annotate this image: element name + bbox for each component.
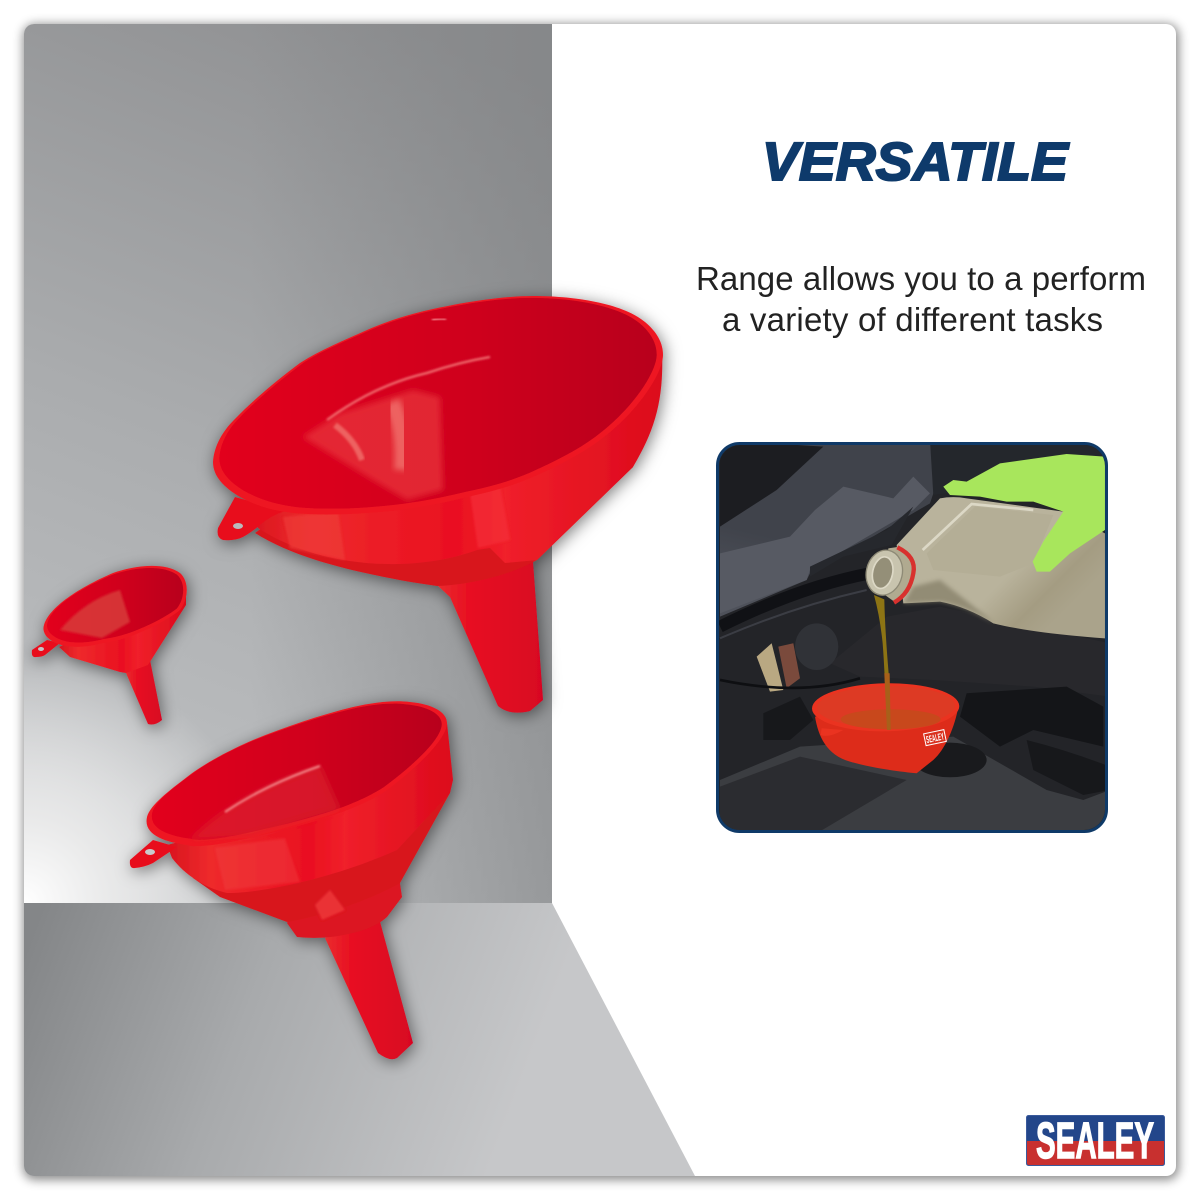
cover recess [720,440,823,527]
bottle body [897,497,1105,638]
bottle neck [885,547,913,603]
large funnel rim [213,296,663,514]
black hose [720,573,870,627]
small funnel interior [47,568,183,642]
description text [696,260,1146,338]
oil stream [874,595,889,682]
large funnel tab [218,497,285,540]
medium funnel collar [287,870,402,938]
cover lower panel [720,477,930,613]
bottle edge highlight [923,504,1033,550]
bottle neck ring [894,547,914,603]
medium funnel inner glint [225,766,320,812]
top right dark area [930,445,1024,494]
description text: Range allows you to a perform [696,260,1146,297]
large funnel band [248,350,662,564]
large funnel [213,296,663,713]
red funnel tab [821,728,843,736]
medium funnel band highlights [215,838,300,890]
medium funnel interior [152,704,442,840]
red funnel body [815,707,958,773]
plastic cover [720,445,934,616]
medium funnel [130,701,453,1059]
title: VERSATILE [762,132,1070,192]
bottle mouth [865,550,904,596]
photo: oil being poured into funnel [717,440,1110,833]
large funnel cone [255,440,633,586]
red funnel interior [817,686,955,724]
medium funnel tab [130,840,177,868]
small funnel inner cone [60,590,130,638]
medium funnel cone [193,793,450,922]
small funnel body [59,587,186,673]
bottle lower shadow [903,580,993,623]
medium funnel rim [147,701,447,846]
hose right [1027,740,1110,795]
engine parts [757,643,783,692]
dark carpet panel [830,607,1110,697]
funnel logo [924,730,946,746]
description text: a variety of different tasks [722,301,1103,338]
red funnel oil pool [841,709,941,729]
engine bay background [719,445,1088,813]
large funnel stem [437,560,543,713]
bottle handle recess [927,507,1053,577]
small funnel [32,566,187,724]
small funnel tab [32,640,60,657]
small funnel stem [126,660,162,724]
funnel logo: SEALEY [925,731,945,746]
medium funnel collar highlight [315,890,345,920]
left backdrop [24,24,695,1176]
oil stream lower [884,673,891,730]
large funnel interior [219,298,657,509]
grille [810,507,913,577]
medium funnel band [167,723,453,893]
large funnel band highlights [283,485,510,560]
engine cover [720,737,1110,833]
large funnel inner highlights [303,319,490,500]
small funnel rim [43,566,187,647]
medium funnel inner cone [190,765,340,840]
medium funnel stem [325,918,413,1059]
green glove [943,454,1105,572]
red funnel rim [812,682,960,733]
